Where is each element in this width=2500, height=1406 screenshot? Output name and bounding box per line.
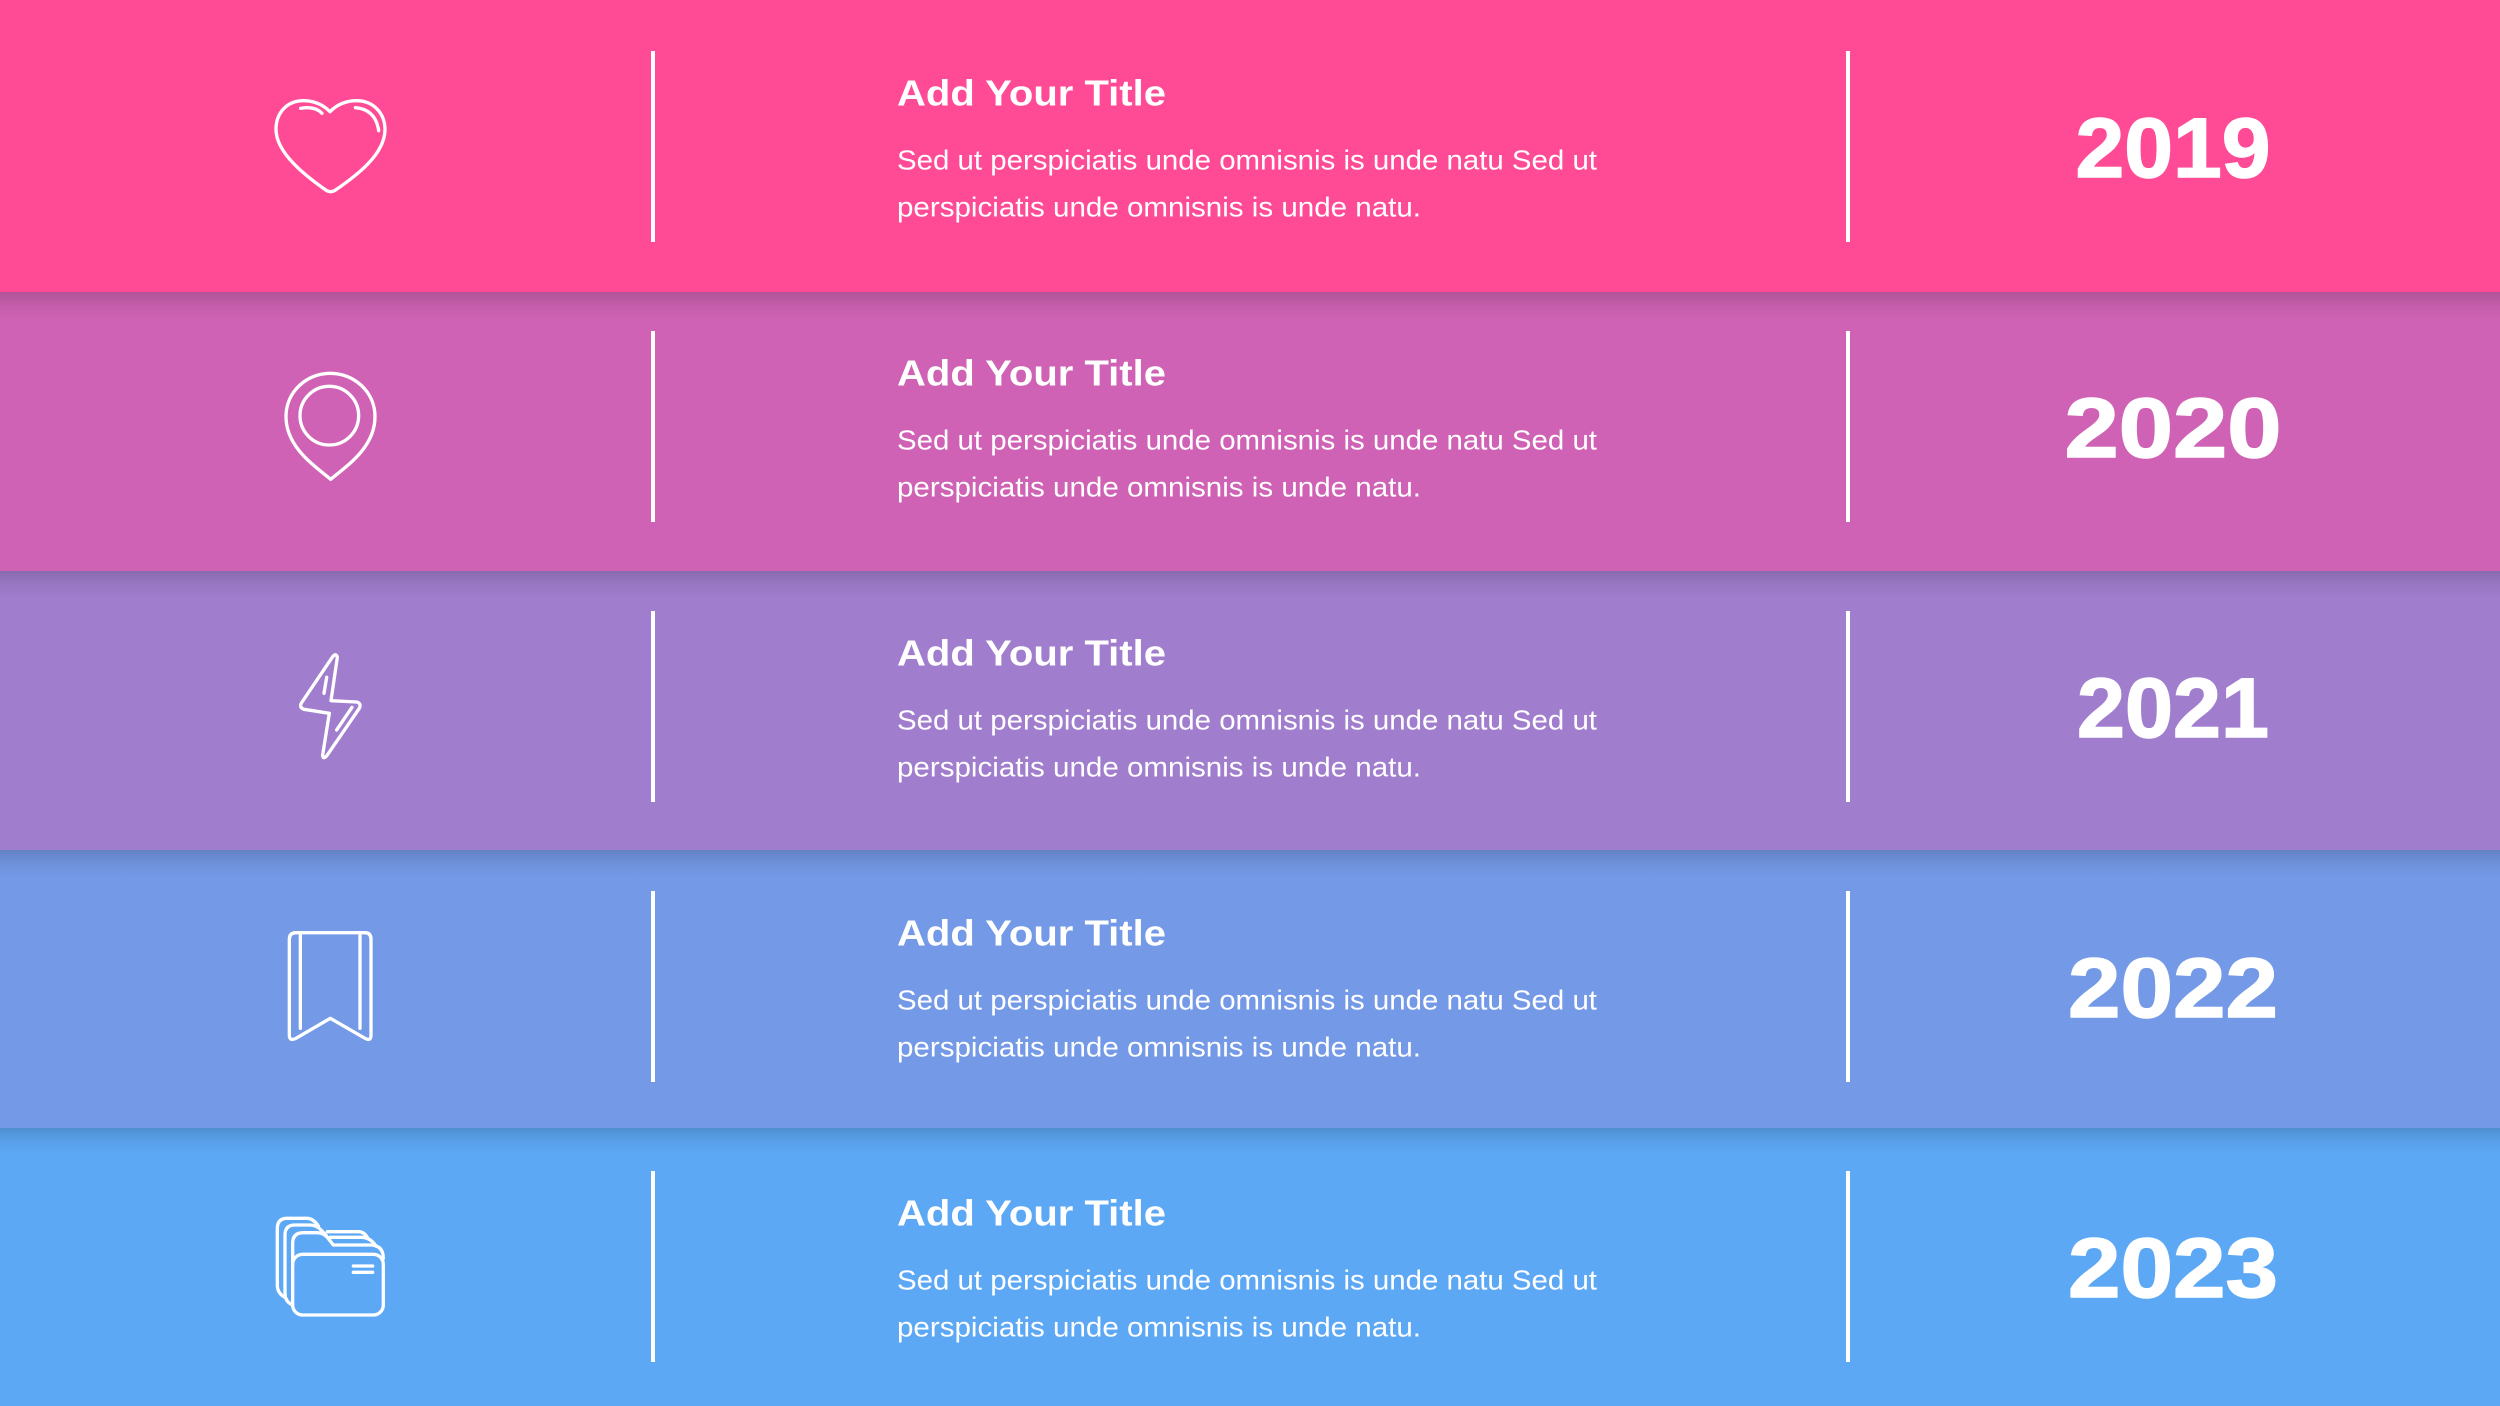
panel: 2023 — [0, 1128, 2500, 1406]
panel: 2021 — [0, 571, 2500, 850]
icon: folders — [277, 1218, 383, 1315]
divider right — [1846, 1171, 1850, 1362]
year: 2019 — [2076, 101, 2270, 195]
text block: Sed ut perspiciatis unde omnisnis is unde natu Sed ut — [897, 144, 1597, 176]
text block: Sed ut perspiciatis unde omnisnis is unde natu Sed ut — [897, 424, 1597, 456]
icon: location pin — [286, 373, 375, 479]
heading: Add Your Title — [897, 912, 1166, 954]
panel: 2020 — [0, 292, 2500, 571]
text block: perspiciatis unde omnisnis is unde natu. — [897, 472, 1421, 502]
text block: perspiciatis unde omnisnis is unde natu. — [897, 1032, 1421, 1062]
panel: 2019 — [0, 0, 2500, 292]
divider left — [651, 891, 655, 1082]
year: 2021 — [2077, 661, 2269, 755]
heading: Add Your Title — [897, 1192, 1166, 1234]
text block: Sed ut perspiciatis unde omnisnis is unde natu Sed ut — [897, 704, 1597, 736]
icon: heart — [276, 101, 385, 192]
divider left — [651, 331, 655, 522]
text block — [897, 424, 1597, 502]
heading: Add Your Title — [897, 72, 1166, 114]
text block: Sed ut perspiciatis unde omnisnis is unde natu Sed ut — [897, 984, 1597, 1016]
divider right — [1846, 611, 1850, 802]
heading: Add Your Title — [897, 632, 1166, 674]
text block: perspiciatis unde omnisnis is unde natu. — [897, 752, 1421, 782]
divider right — [1846, 891, 1850, 1082]
text block: perspiciatis unde omnisnis is unde natu. — [897, 1312, 1421, 1342]
text block — [897, 984, 1597, 1062]
year: 2022 — [2068, 941, 2278, 1035]
icon: lightning bolt — [301, 655, 360, 758]
divider left — [651, 611, 655, 802]
year: 2020 — [2064, 381, 2282, 475]
icon: bookmark — [289, 933, 371, 1039]
text block — [897, 704, 1597, 782]
text block: Sed ut perspiciatis unde omnisnis is unde natu Sed ut — [897, 1264, 1597, 1296]
text block — [897, 144, 1597, 222]
divider right — [1846, 51, 1850, 242]
panel: 2022 — [0, 850, 2500, 1129]
text block — [897, 1264, 1597, 1342]
divider left — [651, 1171, 655, 1362]
year: 2023 — [2068, 1221, 2278, 1315]
heading: Add Your Title — [897, 352, 1166, 394]
divider right — [1846, 331, 1850, 522]
text block: perspiciatis unde omnisnis is unde natu. — [897, 192, 1421, 222]
divider left — [651, 51, 655, 242]
